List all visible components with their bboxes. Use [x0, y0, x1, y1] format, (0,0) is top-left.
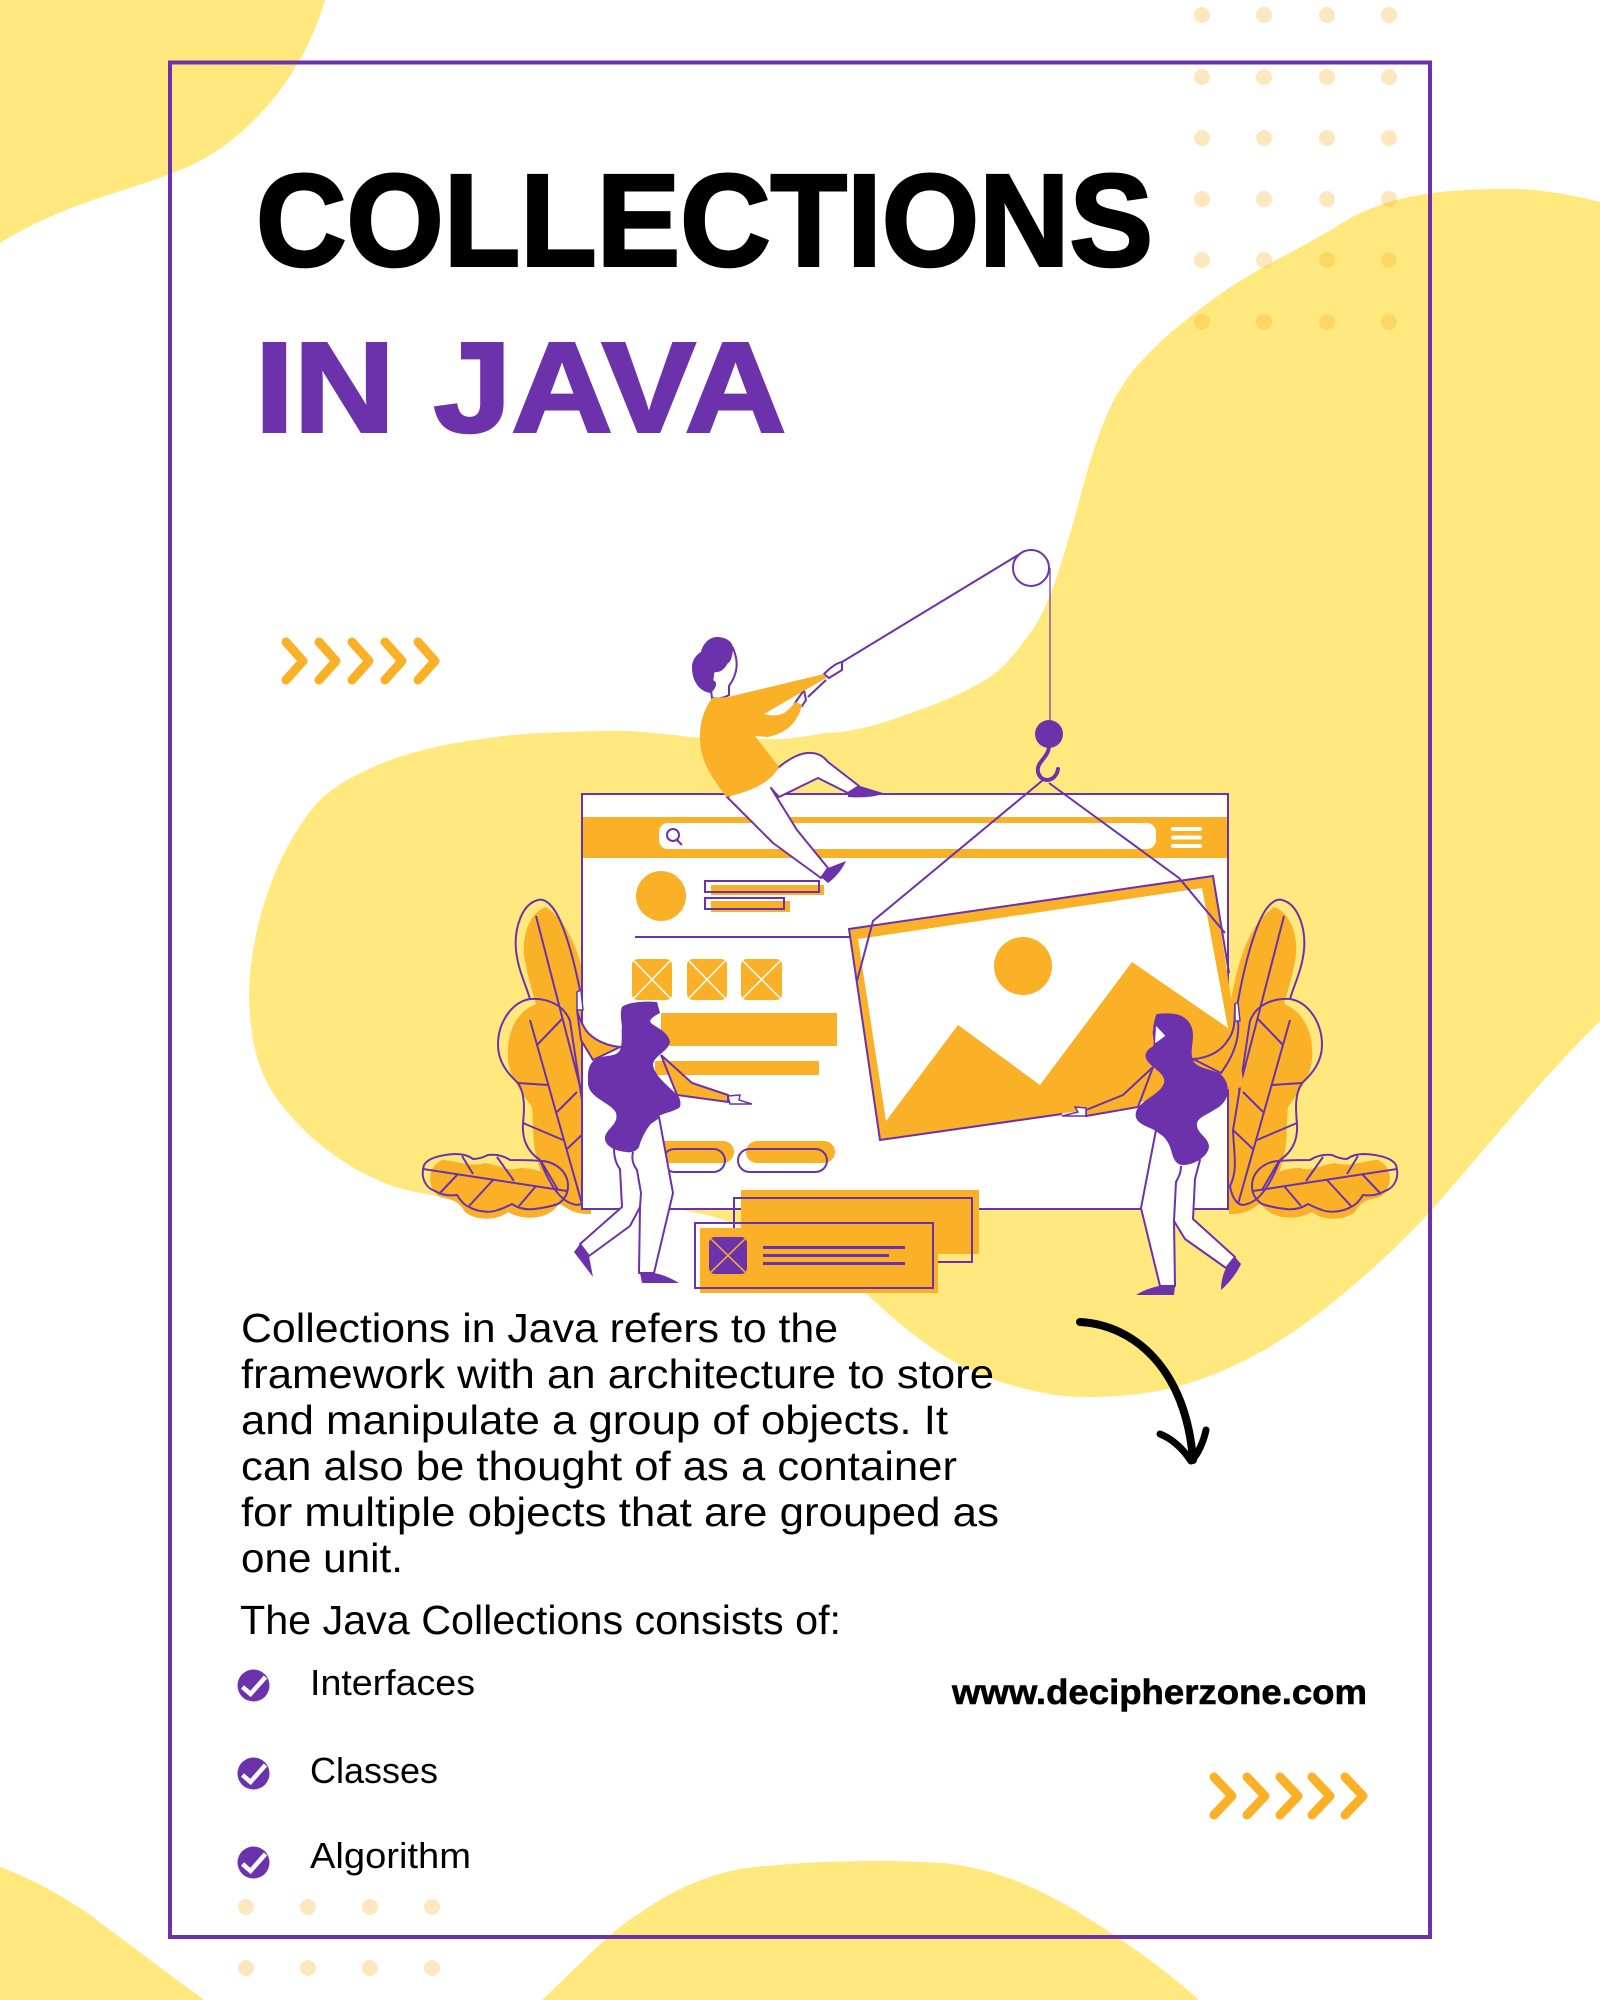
feet: [821, 786, 883, 883]
illustration: website being assembled: [423, 550, 1397, 1295]
rope over pulley: [808, 550, 1050, 722]
dot grid: top right: [1194, 7, 1397, 330]
search box: [659, 823, 1156, 849]
intro paragraph: for multiple objects that are grouped as: [241, 1489, 999, 1535]
window frame: [582, 794, 1228, 1209]
purple page frame: [170, 62, 1430, 1937]
background blob: large centre right: [249, 189, 1600, 1397]
right person hand: [1062, 1107, 1086, 1116]
website url: www.decipherzone.com: [951, 1673, 1367, 1712]
left person feet: [574, 1244, 679, 1283]
plant leaves: left: [423, 900, 591, 1219]
person on top pulling rope: [692, 550, 1063, 883]
chevrons: top left: [286, 642, 435, 680]
left person legs: [580, 1117, 673, 1273]
buttons: [650, 1141, 835, 1172]
person right: [1062, 1002, 1241, 1295]
intro paragraph: can also be thought of as a container: [241, 1443, 957, 1489]
chevrons: bottom right: [1214, 1777, 1363, 1815]
right person feet: [1136, 1257, 1241, 1295]
hanging picture: [849, 780, 1244, 1140]
title: IN JAVA: IN JAVA: [255, 316, 786, 460]
cards: [695, 1190, 979, 1293]
intro paragraph: and manipulate a group of objects. It: [241, 1397, 949, 1443]
icon: magnifier: [667, 829, 682, 845]
dot grid: bottom left: [238, 1899, 440, 1976]
card thumbnail: [709, 1237, 747, 1274]
image placeholders: [632, 959, 782, 1000]
intro paragraph: framework with an architecture to store: [241, 1351, 994, 1397]
picture frame: [849, 876, 1244, 1140]
left person hand raised: [577, 990, 583, 1010]
list item: Classes: [238, 1750, 438, 1791]
toolbar: [583, 817, 1227, 858]
background blob: bottom centre: [542, 1861, 1199, 2000]
icon: menu: [1173, 829, 1200, 846]
list heading: The Java Collections consists of:: [240, 1597, 841, 1643]
sling ropes: [857, 780, 1225, 981]
sweater: [700, 674, 826, 797]
hook: [1035, 720, 1063, 780]
content bars: [650, 1013, 837, 1075]
title: COLLECTIONS: COLLECTIONS: [256, 146, 1153, 294]
head: [711, 648, 737, 699]
picture sun: [994, 937, 1052, 995]
right person face: [1153, 1024, 1166, 1044]
hands: [795, 662, 842, 706]
plant leaves: right: [1229, 900, 1397, 1219]
list item: Interfaces: [238, 1662, 475, 1703]
person left: [574, 990, 752, 1283]
list item: Algorithm: [238, 1835, 471, 1878]
left person arm forward: [661, 1055, 728, 1102]
background blob: bottom left: [0, 1867, 204, 2000]
list item: Algorithm: Algorithm: [310, 1835, 471, 1876]
left person hand: [728, 1095, 752, 1104]
right person legs: [1141, 1130, 1235, 1286]
profile text bars: [705, 881, 824, 912]
list item: Interfaces: Interfaces: [310, 1662, 475, 1703]
picture outline: [849, 876, 1229, 1140]
intro paragraph: one unit.: [241, 1535, 403, 1581]
intro paragraph: [241, 1305, 999, 1581]
avatar: [636, 871, 686, 921]
legs: [727, 753, 859, 878]
icon: curved arrow: [1080, 1322, 1206, 1461]
intro paragraph: Collections in Java refers to the: [241, 1305, 838, 1351]
right person hair and top: [1136, 1013, 1228, 1165]
list item: Classes: Classes: [310, 1750, 438, 1791]
right person hand raised: [1235, 1002, 1240, 1021]
picture sky: [858, 888, 1228, 1121]
right person arm forward: [1086, 1067, 1153, 1116]
browser window: [582, 794, 1228, 1209]
hair: [692, 637, 733, 693]
background blob: top left: [0, 0, 325, 243]
left person arm raised: [577, 1010, 620, 1060]
right person arm raised: [1193, 1004, 1238, 1073]
left person hair and top: [588, 1002, 680, 1152]
left person face: [648, 1010, 661, 1032]
